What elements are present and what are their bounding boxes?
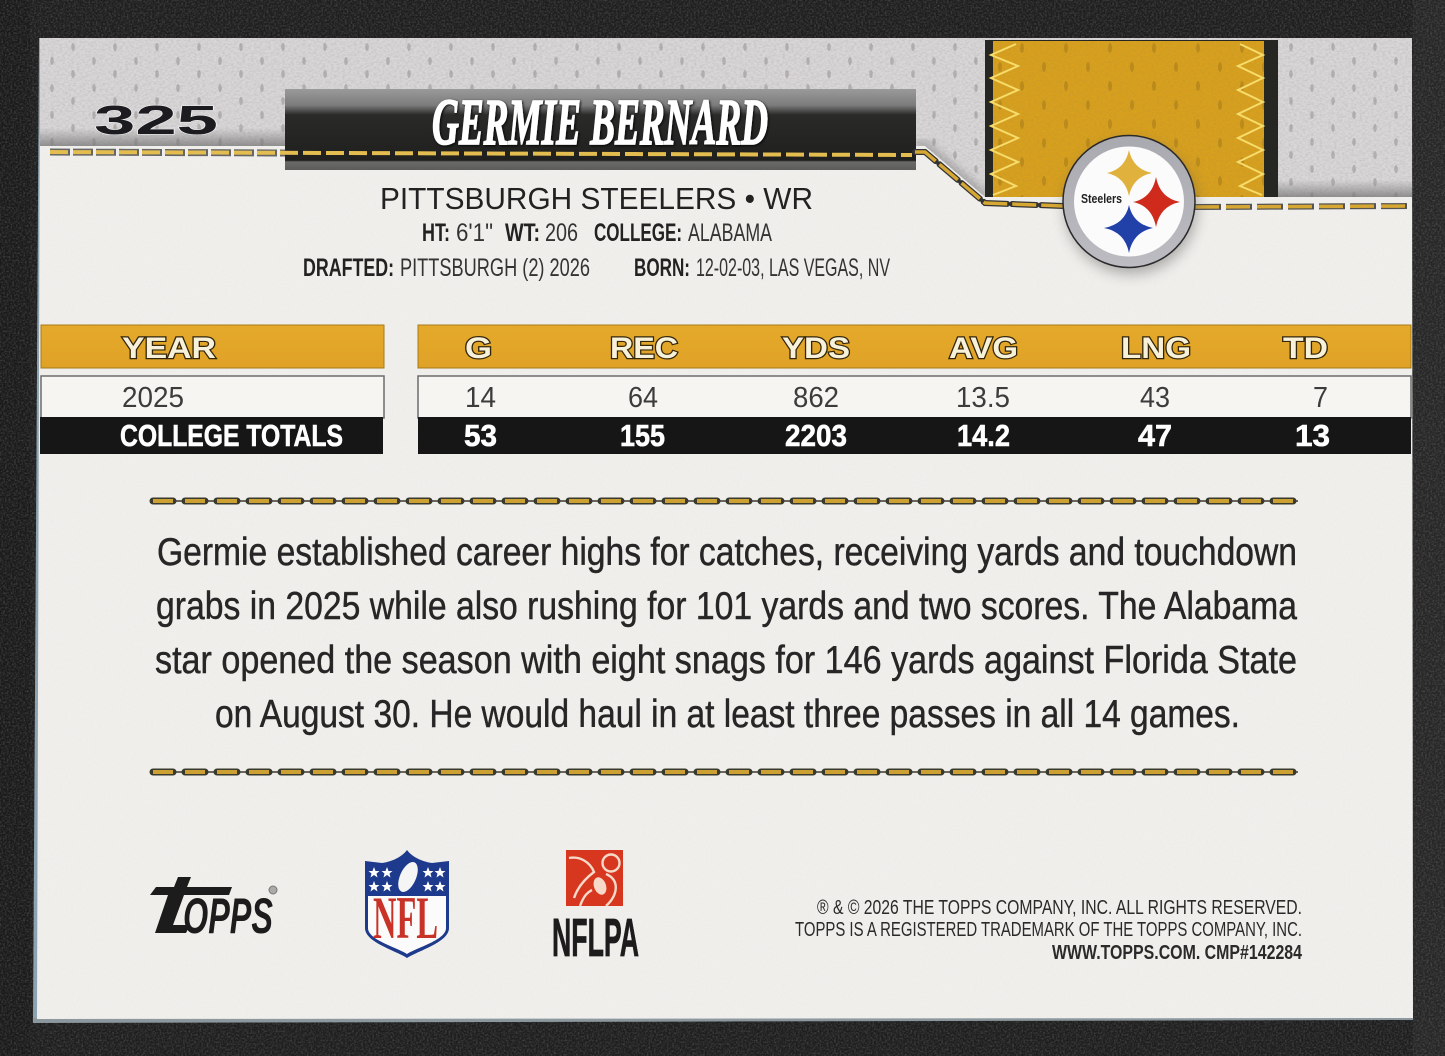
copyright legal text: WWW.TOPPS.COM. CMP#142284 [1052, 942, 1303, 964]
player vitals: DRAFTED: [303, 254, 394, 282]
player biography [155, 531, 1297, 736]
stats table: statistics columns: 47 [1138, 418, 1172, 453]
player biography: star opened the season with eight snags for 146 yards against Florida State [155, 639, 1297, 682]
stats table: statistics columns: 7 [1313, 382, 1328, 414]
stats table: statistics columns: 14.2 [957, 418, 1010, 453]
jersey mesh header [40, 38, 1412, 198]
player biography: grabs in 2025 while also rushing for 101 yards and two scores. The Alabama [156, 585, 1297, 628]
stats table: statistics columns: 155 [620, 418, 665, 453]
trading card back infographic: NFLPA [552, 908, 639, 968]
stats table: statistics columns: 14 [465, 382, 496, 414]
player vitals: HT: [422, 219, 450, 247]
stats table: statistics columns: 2203 [785, 418, 847, 453]
stats table: statistics columns: 862 [793, 382, 839, 414]
NFL shield logo: NFL [373, 885, 438, 951]
player vitals: COLLEGE: [594, 219, 682, 247]
team logo [1063, 136, 1197, 274]
gold stitching header [50, 152, 1412, 207]
topps logo: opps [183, 870, 273, 949]
stats table: year column: YEAR [122, 332, 216, 365]
player vitals: PITTSBURGH (2) 2026 [400, 254, 590, 282]
stats table: statistics columns: 64 [628, 382, 658, 414]
player biography: Germie established career highs for catches, receiving yards and touchdown [157, 531, 1297, 574]
name banner: GERMIE BERNARD [432, 86, 768, 159]
NFL shield logo [365, 850, 449, 958]
stitching above bio [153, 500, 1298, 502]
stats table: statistics columns: YDS [782, 332, 850, 365]
stats table: year column [40, 325, 384, 454]
player vitals: 206 [545, 219, 578, 247]
player vitals: BORN: [634, 254, 690, 282]
stats table: statistics columns: LNG [1121, 332, 1191, 365]
player vitals: ALABAMA [688, 219, 772, 247]
card number: 325 [94, 97, 218, 143]
stats table: year column: COLLEGE TOTALS [120, 418, 343, 453]
player vitals: 6'1" [456, 219, 493, 247]
topps logo [150, 870, 277, 949]
stats table: statistics columns: 13 [1295, 418, 1330, 453]
stats table: statistics columns [418, 325, 1411, 454]
player vitals: 12-02-03, LAS VEGAS, NV [696, 254, 890, 282]
player vitals [303, 219, 890, 282]
stats table: statistics columns: 53 [464, 418, 497, 453]
stats table: statistics columns: TD [1283, 332, 1328, 365]
stats table: statistics columns: 13.5 [956, 382, 1010, 414]
copyright legal text [795, 897, 1303, 964]
stats table: statistics columns: G [465, 332, 492, 365]
stats table: year column: 2025 [122, 382, 184, 414]
stats table: statistics columns: 43 [1140, 382, 1170, 414]
stats table: statistics columns: AVG [949, 332, 1018, 365]
name banner [285, 86, 916, 170]
copyright legal text: ® & © 2026 THE TOPPS COMPANY, INC. ALL RIGHTS RESERVED. [817, 897, 1302, 919]
player team and position: PITTSBURGH STEELERS • WR [380, 181, 813, 216]
stitching below bio [153, 771, 1298, 773]
NFLPA logo [552, 850, 639, 968]
player vitals: WT: [505, 219, 540, 247]
team logo: Steelers [1081, 191, 1122, 206]
stats table: statistics columns: REC [610, 332, 678, 365]
gold jersey patch [985, 40, 1278, 197]
player biography: on August 30. He would haul in at least three passes in all 14 games. [215, 693, 1240, 736]
